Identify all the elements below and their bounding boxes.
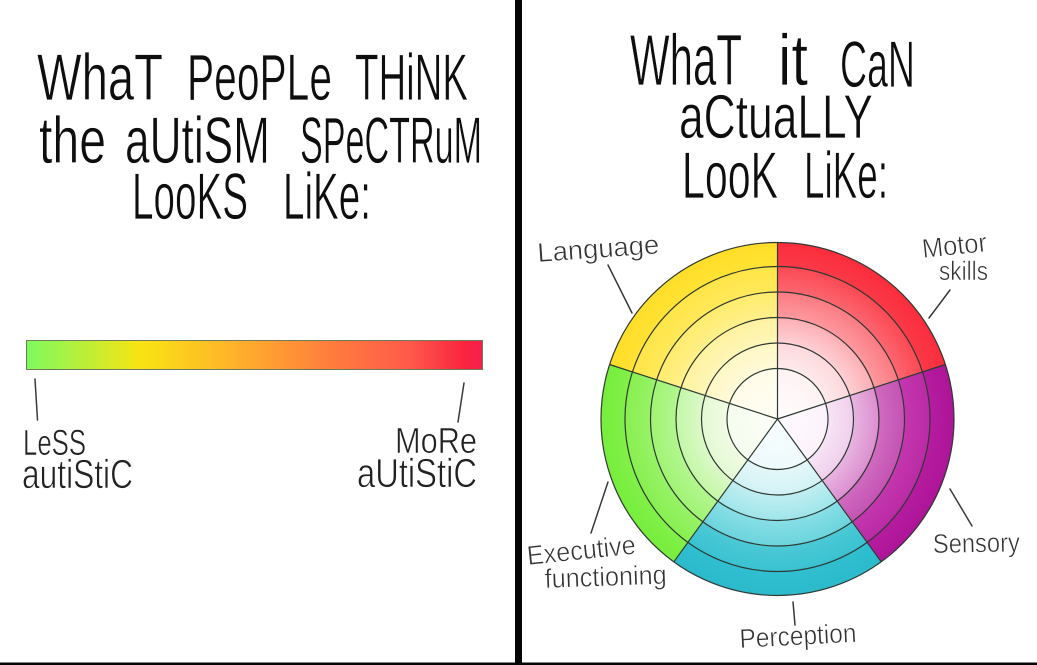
heading: what people think: PeoPLe — [187, 40, 332, 114]
sector: sensory — [778, 364, 954, 562]
linear spectrum bar — [26, 340, 482, 370]
heading: what it can actually look like: LooK — [682, 138, 778, 212]
label: executive functioning — [525, 482, 667, 594]
heading: what people think: THiNK — [355, 40, 468, 114]
label: motor skills: skills — [939, 256, 988, 286]
label: more autistic: MoRe — [395, 420, 477, 461]
panel: what people think — [22, 40, 482, 497]
label: executive functioning: functioning — [544, 560, 667, 594]
label: executive functioning: Executive — [525, 530, 637, 571]
heading: what people think — [37, 40, 482, 233]
heading: what people think: LiKe: — [283, 159, 371, 233]
panel: what it can actually look like — [525, 21, 1021, 654]
heading: what it can actually look like: it — [778, 21, 808, 101]
heading: what it can actually look like: LiKe: — [804, 138, 888, 212]
heading: what people think: LooKS — [132, 159, 248, 233]
label: sensory — [933, 489, 1021, 559]
label: less autistic — [22, 379, 133, 497]
label: more autistic: aUtiStiC — [357, 450, 477, 496]
heading: what people think: aUtiSM — [125, 103, 270, 177]
heading: what it can actually look like: WhaT — [630, 21, 742, 101]
heading: what it can actually look like: CaN — [840, 27, 915, 101]
sector: language — [610, 242, 778, 419]
sector: executive functioning — [601, 364, 778, 562]
panel divider — [515, 0, 522, 665]
label: language: Language — [536, 230, 660, 268]
label: more autistic — [357, 383, 477, 496]
label: sensory: Sensory — [933, 527, 1021, 559]
label: perception: Perception — [739, 618, 857, 654]
label: language — [536, 230, 660, 313]
label: perception — [739, 602, 857, 654]
heading: what people think: WhaT — [37, 40, 163, 114]
sector: perception — [674, 419, 881, 595]
label: less autistic: autiStiC — [22, 451, 133, 497]
heading: what it can actually look like — [630, 21, 915, 212]
bottom border — [0, 662, 1037, 665]
label: motor skills — [920, 227, 988, 318]
label: less autistic: LeSS — [23, 422, 86, 463]
heading: what people think: SPeCTRuM — [300, 103, 482, 177]
label: motor skills: Motor — [920, 227, 988, 264]
heading: what it can actually look like: aCtuaLLY — [679, 83, 873, 152]
heading: what people think: the — [39, 103, 106, 177]
sector: motor skills — [778, 242, 945, 419]
wheel chart — [601, 242, 954, 595]
